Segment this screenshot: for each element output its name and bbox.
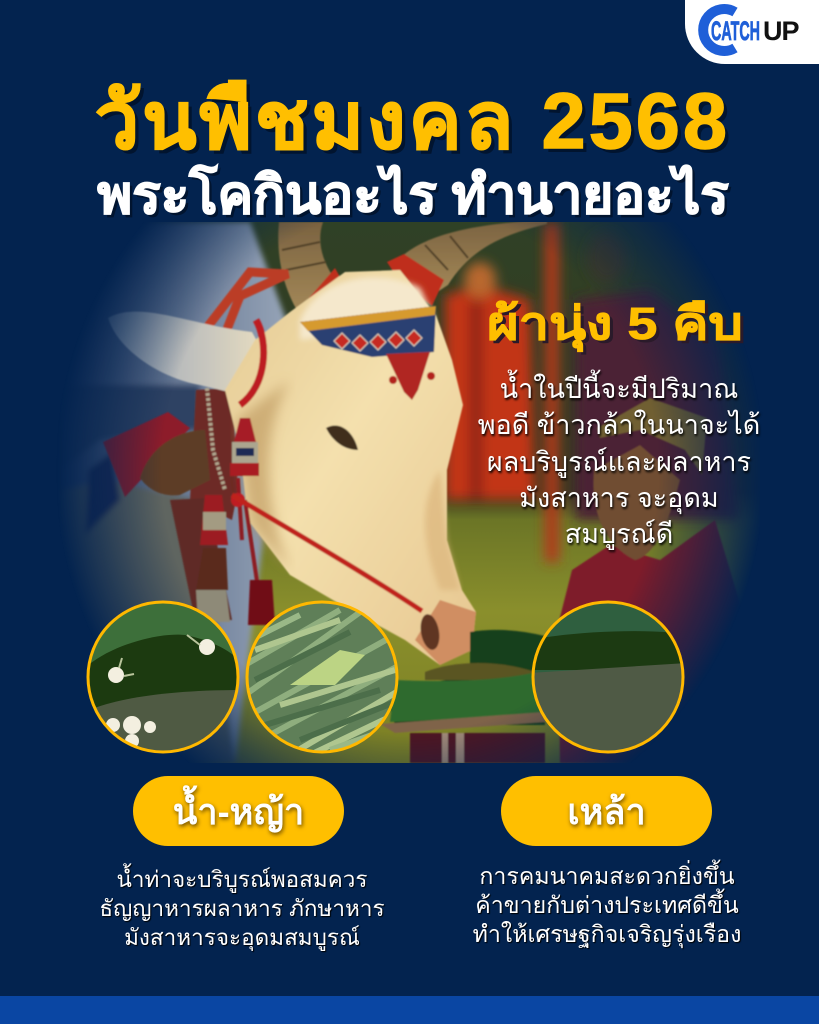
scene: kneeling attendant xyxy=(558,398,745,763)
text: water and grass meaning: มังสาหารจะอุดมสมบูรณ์ xyxy=(124,925,360,950)
prediction text: สมบูรณ์ดี xyxy=(565,519,673,549)
logo text: CATCH xyxy=(711,16,760,46)
heading: cloth length: ผ้านุ่ง 5 คืบ xyxy=(487,298,743,349)
button: liquor xyxy=(501,776,712,846)
button: liquor: เหล้า xyxy=(567,791,646,832)
circle: water and jasmine xyxy=(90,604,236,750)
scene: ear ring xyxy=(240,320,264,405)
scene: red strap xyxy=(190,388,238,520)
logo text: UP xyxy=(763,16,799,46)
prediction text: มังสาหาร จะอุดม xyxy=(519,483,719,513)
circle rings xyxy=(88,602,683,752)
scene: cow horns xyxy=(278,220,547,330)
text: water and grass meaning: น้ำท่าจะบริบูรณ์พอสมควร xyxy=(116,867,368,892)
prediction text: พอดี ข้าวกล้าในนาจะได้ xyxy=(478,410,760,440)
text: liquor meaning: ค้าขายกับต่างประเทศดีขึ้น xyxy=(475,892,739,918)
title: วันพืชมงคล 2568 xyxy=(95,76,730,165)
prediction text: น้ำในปีนี้จะมีปริมาณ xyxy=(500,374,738,404)
logo text xyxy=(711,16,799,46)
text: liquor meaning: การคมนาคมสะดวกยิ่งขึ้น xyxy=(479,863,735,889)
circle: grass xyxy=(248,604,396,750)
scene: red sleeve and hand xyxy=(103,412,190,497)
scene: leaf tray xyxy=(380,630,545,763)
button: water and grass xyxy=(133,776,344,846)
button: water and grass: น้ำ-หญ้า xyxy=(173,791,304,832)
subtitle: พระโคกินอะไร ทำนายอะไร xyxy=(97,166,729,225)
text: liquor meaning xyxy=(473,860,742,950)
prediction text xyxy=(478,370,761,554)
bottom band xyxy=(0,996,819,1024)
scene: rope xyxy=(231,493,422,611)
scene: cow ear xyxy=(108,312,262,396)
text: liquor meaning: ทำให้เศรษฐกิจเจริญรุ่งเรือง xyxy=(473,921,741,947)
circle: water xyxy=(534,604,682,750)
scene: headband xyxy=(300,306,436,400)
scene: harness over neck xyxy=(205,272,288,342)
scene: attendant cloth xyxy=(60,222,290,763)
scene: tassels xyxy=(196,418,275,625)
text: water and grass meaning xyxy=(99,863,386,952)
text: water and grass meaning: ธัญญาหารผลาหาร ภักษาหาร xyxy=(99,896,385,921)
photo scene xyxy=(0,222,819,1024)
logo badge xyxy=(685,0,819,64)
logo ring xyxy=(698,4,738,56)
prediction text: ผลบริบูรณ์และผลาหาร xyxy=(487,447,751,477)
scene: cow head xyxy=(225,270,476,665)
